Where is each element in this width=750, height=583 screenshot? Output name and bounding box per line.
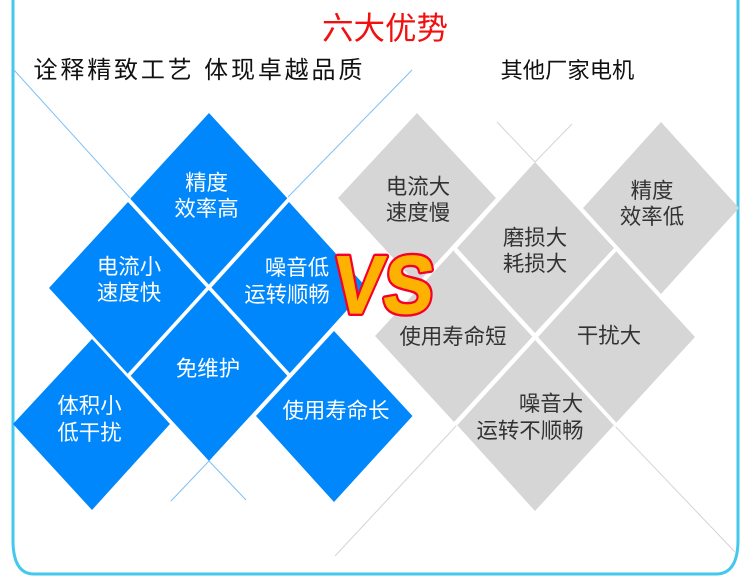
diamond: maintenance free: 免维护 (176, 357, 240, 381)
diamond: noise: 噪音低 (265, 256, 329, 280)
diamond: gray short life: 使用寿命短 (400, 325, 506, 349)
left connector lines (14, 70, 412, 501)
panel: other manufacturers (338, 113, 739, 511)
diamond: gray precision (583, 122, 739, 294)
diamond: gray short life (375, 250, 533, 422)
diamond: current (49, 202, 207, 374)
diamond: gray current: 电流大 (386, 175, 450, 199)
diamond: gray precision: 精度 (631, 179, 673, 203)
diamond: long life (256, 331, 412, 502)
diamond: gray interference: 干扰大 (577, 324, 641, 348)
white gaps between diamonds (128, 198, 617, 426)
diamond: gray wear (457, 162, 614, 333)
diamond: low interference: 体积小 (57, 394, 122, 418)
diamond: noise (211, 202, 367, 374)
diamond: current: 速度快 (97, 281, 161, 305)
diamond: current: 电流小 (97, 255, 161, 279)
diamond: precision (130, 113, 288, 285)
diamond: maintenance free (130, 289, 288, 461)
diamond: gray noise: 运转不顺畅 (477, 419, 583, 443)
right subtitle: 其他厂家电机 (500, 58, 634, 83)
VS emblem: VS (329, 240, 439, 331)
title: 六大优势 (322, 10, 448, 46)
panel: our motor advantages (13, 113, 412, 510)
diamond: low interference (13, 339, 170, 510)
diamond: gray wear: 磨损大 (503, 226, 567, 250)
diamond: gray wear: 耗损大 (503, 252, 567, 276)
diamond: low interference: 低干扰 (57, 421, 122, 445)
left subtitle: 诠释精致工艺 体现卓越品质 (34, 57, 365, 84)
diamond: precision: 精度 (185, 171, 228, 195)
diamond: gray interference (538, 251, 695, 423)
diamond: gray current: 速度慢 (386, 201, 450, 225)
diamond: gray current (338, 113, 496, 284)
diamond: gray precision: 效率低 (620, 205, 684, 229)
diamond: gray noise: 噪音大 (519, 392, 583, 416)
diamond: noise: 运转顺畅 (244, 283, 330, 307)
diamond: precision: 效率高 (174, 197, 239, 221)
VS emblem: VS (329, 240, 439, 331)
right connector lines (335, 122, 735, 556)
diamond: long life: 使用寿命长 (283, 399, 389, 423)
diamond: gray noise (457, 340, 614, 511)
